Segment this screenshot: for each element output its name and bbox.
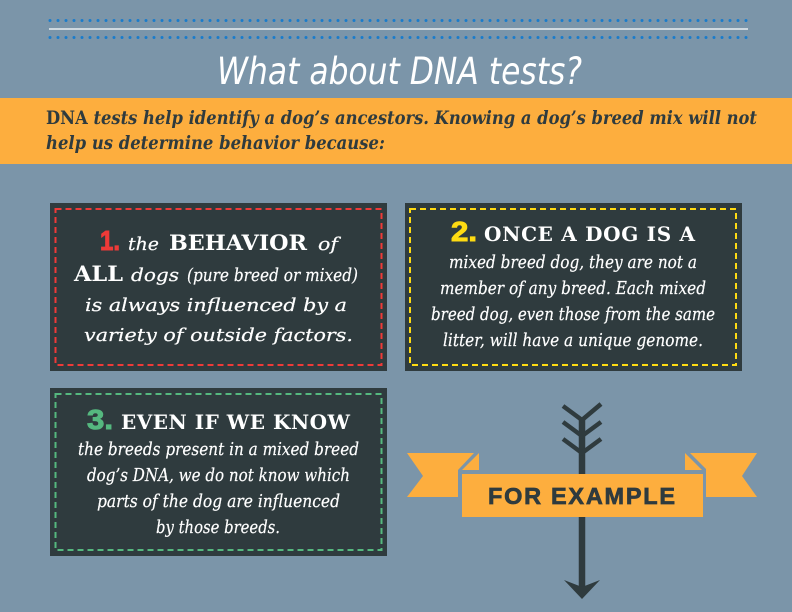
- reason 1 text: [73, 230, 358, 346]
- reason 3 text: parts of the dog are influenced: [97, 491, 340, 512]
- intro text: [46, 108, 757, 154]
- reason 1 text: is always influenced by a: [85, 295, 347, 316]
- reason 2 text: litter, will have a unique genome.: [443, 330, 703, 351]
- reason 2 text: mixed breed dog, they are not a: [449, 252, 697, 273]
- panel: reason 3: [50, 388, 387, 556]
- number 3: 3.: [87, 404, 113, 435]
- reason 3 text: dog’s DNA, we do not know which: [87, 465, 350, 486]
- reason 2 text: member of any breed. Each mixed: [440, 278, 706, 299]
- ribbon label: FOR EXAMPLE: [488, 483, 675, 509]
- reason 1 text: ALL: [73, 261, 123, 286]
- ribbon: for example: [407, 453, 757, 517]
- reason 1 text: (pure breed or mixed): [187, 265, 358, 286]
- intro text: help us determine behavior because:: [46, 133, 385, 154]
- number 2: 2.: [451, 216, 477, 247]
- reason 1 text: the: [128, 234, 159, 255]
- icon: arrow: [563, 404, 601, 599]
- reason 3 text: the breeds present in a mixed breed: [78, 439, 359, 460]
- reason 1 text: variety of outside factors.: [84, 325, 353, 346]
- reason 3 text: EVEN IF WE KNOW: [121, 410, 351, 434]
- reason 3 text: by those breeds.: [156, 517, 280, 538]
- panel: reason 2: [405, 203, 742, 371]
- reason 1 text: BEHAVIOR: [169, 230, 308, 255]
- reason 2 text: breed dog, even those from the same: [431, 304, 715, 325]
- panel: reason 1: [50, 203, 387, 371]
- reason 3 text: [78, 410, 359, 538]
- reason 1 text: dogs: [131, 265, 179, 286]
- intro banner: [0, 98, 792, 164]
- number 1: 1.: [100, 225, 120, 256]
- reason 1 text: of: [318, 234, 342, 255]
- reason 2 text: ONCE A DOG IS A: [484, 222, 695, 246]
- title: What about DNA tests?: [217, 50, 582, 93]
- reason 2 text: [431, 222, 715, 351]
